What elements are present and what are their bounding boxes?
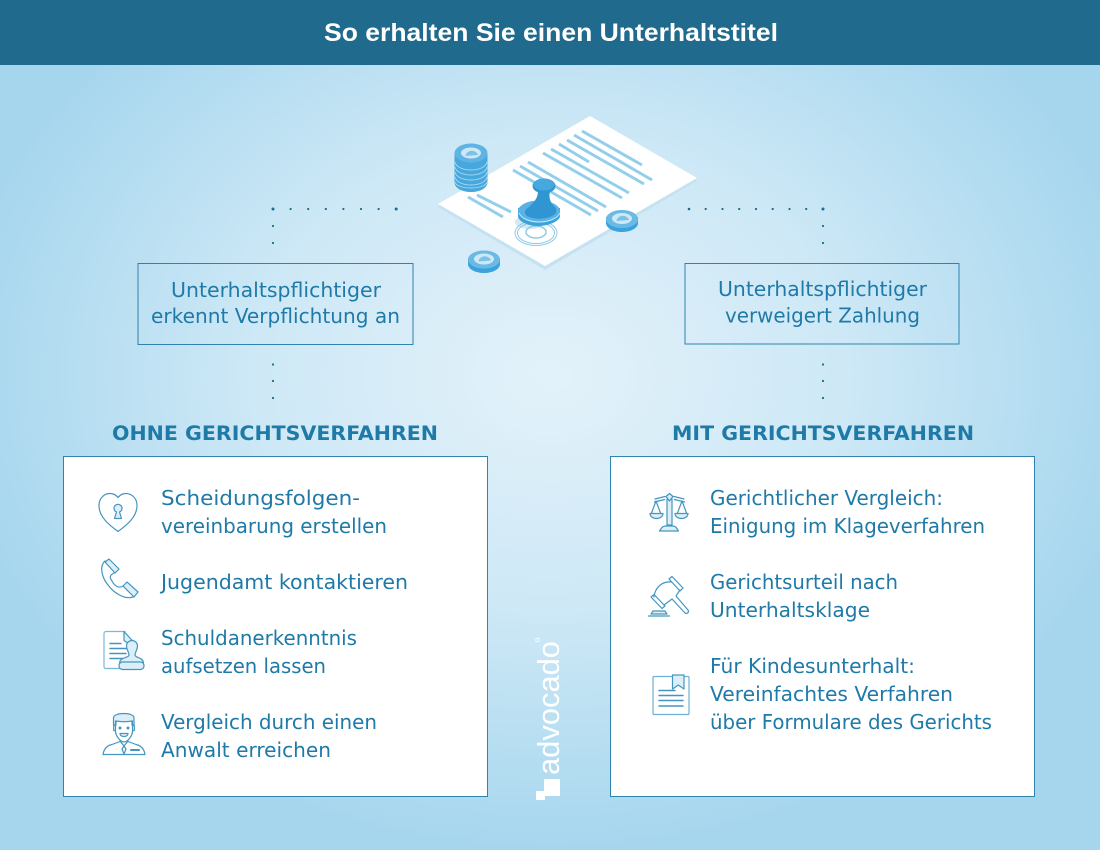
text: court judgment: Gerichtsurteil nach bbox=[710, 570, 898, 594]
icon: lawyer bbox=[103, 714, 145, 754]
box: refuses payment bbox=[685, 264, 959, 344]
stamp bbox=[518, 178, 560, 226]
text: lawyer settlement line 2: Anwalt erreichen bbox=[161, 738, 331, 762]
dotted connector: lower right bbox=[822, 363, 824, 399]
header bar bbox=[0, 0, 1100, 65]
box: acknowledges obligation: Unterhaltspflichtiger bbox=[171, 278, 382, 302]
text: court judgment line 2: Unterhaltsklage bbox=[710, 598, 870, 622]
heading: with court: MIT GERICHTSVERFAHREN bbox=[672, 422, 974, 445]
heading: without court: OHNE GERICHTSVERFAHREN bbox=[112, 422, 438, 445]
text: child support line 3: über Formulare des Gerichts bbox=[710, 710, 992, 734]
coin left bbox=[468, 250, 500, 273]
panel: without court bbox=[64, 456, 488, 796]
text: debt acknowledgment line 2: aufsetzen lassen bbox=[161, 654, 326, 678]
box: refuses payment: Unterhaltspflichtiger bbox=[718, 277, 928, 301]
illustration: document with stamp and coins bbox=[438, 116, 697, 273]
panel: with court bbox=[610, 456, 1034, 796]
box: refuses payment: verweigert Zahlung bbox=[725, 304, 920, 328]
coin right bbox=[606, 210, 638, 232]
text: debt acknowledgment: Schuldanerkenntnis bbox=[161, 626, 357, 650]
text: lawyer settlement: Vergleich durch einen bbox=[161, 710, 377, 734]
text: settlement agreement line 2: vereinbarung erstellen bbox=[161, 514, 387, 538]
text: child support: Für Kindesunterhalt: bbox=[710, 654, 915, 678]
box: acknowledges obligation bbox=[138, 264, 413, 344]
text: settlement agreement: Scheidungsfolgen- bbox=[161, 486, 360, 510]
icon: telephone bbox=[102, 559, 138, 598]
document sheet bbox=[438, 116, 697, 270]
icon: document with bookmark bbox=[653, 675, 689, 714]
title: So erhalten Sie einen Unterhaltstitel bbox=[324, 19, 778, 47]
icon: heart with keyhole bbox=[99, 494, 137, 532]
coin stack bbox=[454, 144, 488, 192]
logo: advocado: advocado bbox=[531, 641, 566, 775]
dotted connector: top right bbox=[688, 208, 824, 244]
text: court settlement: Gerichtlicher Vergleich: bbox=[710, 486, 943, 510]
text: child support line 2: Vereinfachtes Verfahren bbox=[710, 682, 953, 706]
icon: document with stamp bbox=[104, 632, 144, 670]
dotted connector: top left bbox=[272, 208, 398, 244]
icon: scales bbox=[650, 494, 688, 531]
stamp impression bbox=[515, 215, 557, 246]
icon: gavel bbox=[648, 576, 688, 616]
text: youth office: Jugendamt kontaktieren bbox=[159, 570, 408, 594]
dotted connector: lower left bbox=[272, 363, 274, 399]
box: acknowledges obligation: erkennt Verpflichtung an bbox=[151, 304, 400, 328]
text: court settlement line 2: Einigung im Klageverfahren bbox=[710, 514, 985, 538]
